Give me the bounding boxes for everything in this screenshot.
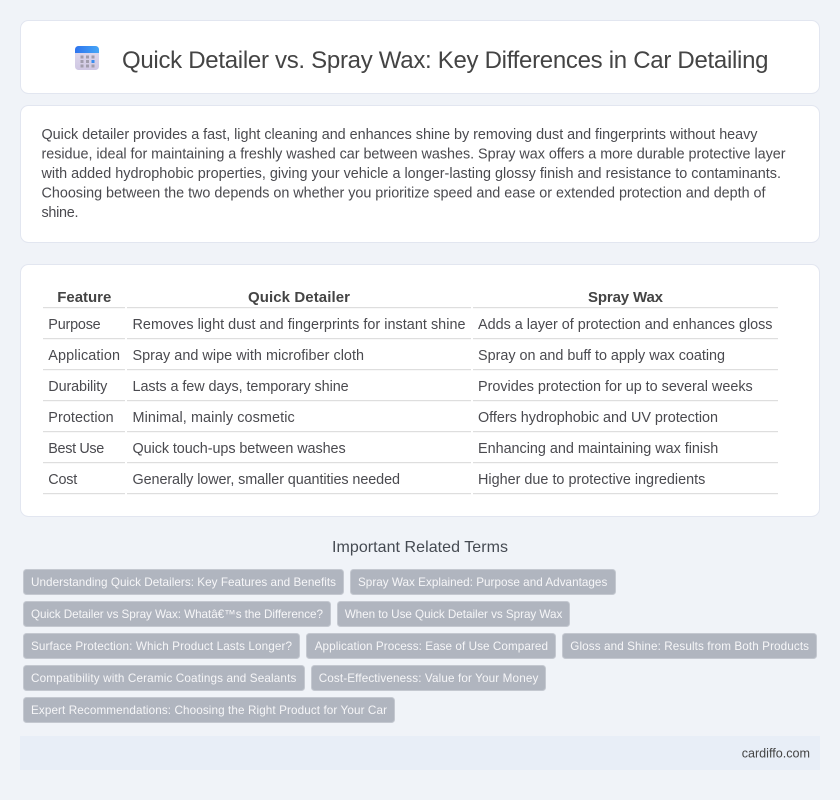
table row: purpose: Removes light dust and fingerprints for instant shine: [132, 317, 466, 333]
table row: durability: Provides protection for up to several weeks: [478, 379, 753, 395]
table row: durability: [48, 379, 753, 395]
table row: cost: [48, 472, 705, 488]
tag: Compatibility with Ceramic Coatings and Sealants: [31, 672, 296, 685]
table row: protection: [48, 410, 718, 426]
tag: Gloss and Shine: Results from Both Products: [570, 640, 809, 653]
table header row: Feature: [57, 289, 111, 306]
tag: [312, 666, 546, 690]
tag: [24, 666, 304, 690]
tag: [338, 602, 570, 626]
table row: protection: Minimal, mainly cosmetic: [132, 410, 295, 426]
tag: [350, 570, 616, 594]
panel: intro paragraph: [20, 106, 820, 242]
text block: intro: with added hydrophobic properties, giving your vehicle a longer-lasting glossy finish and resistance to contaminants.: [40, 166, 781, 182]
text block: intro: shine.: [42, 205, 78, 221]
table row: best use: [48, 441, 718, 457]
table row: purpose: Purpose: [48, 317, 101, 333]
table row: application: Spray and wipe with microfiber cloth: [132, 348, 364, 364]
tag: Surface Protection: Which Product Lasts Longer?: [31, 640, 292, 653]
tag: [306, 634, 556, 658]
table row: protection: Offers hydrophobic and UV protection: [478, 410, 718, 426]
tag: [24, 698, 394, 722]
tag: Expert Recommendations: Choosing the Right Product for Your Car: [31, 704, 387, 717]
tag: [24, 634, 300, 658]
text block: intro: [40, 127, 786, 221]
title: Quick Detailer vs. Spray Wax: Key Differences in Car Detailing: [122, 47, 768, 74]
table row: cost: Generally lower, smaller quantities needed: [132, 472, 400, 488]
table row: cost: Cost: [48, 472, 77, 488]
table row: application: [48, 348, 725, 364]
table header row: Quick Detailer: [248, 289, 350, 306]
heading: important related terms: Important Related Terms: [332, 539, 508, 556]
table row: best use: Best Use: [48, 441, 104, 457]
tag: Cost-Effectiveness: Value for Your Money: [319, 672, 538, 685]
table row: purpose: [48, 317, 773, 333]
table row: cost: Higher due to protective ingredients: [478, 472, 705, 488]
text block: intro: Quick detailer provides a fast, light cleaning and enhances shine by removing dust and fingerprints without heavy: [42, 127, 758, 143]
tag: Spray Wax Explained: Purpose and Advantages: [358, 576, 607, 589]
panel: comparison table: [20, 264, 820, 516]
table row: application: Application: [48, 348, 120, 364]
table header row: [57, 289, 664, 306]
table row: protection: Protection: [48, 410, 114, 426]
tag: [24, 602, 330, 626]
text block: intro: residue, ideal for maintaining a freshly washed car between washes. Spray wax offers a more durable protective layer: [42, 146, 786, 162]
footer: cardiffo.com: [742, 746, 810, 760]
footer: [20, 736, 820, 770]
table row: durability: Lasts a few days, temporary shine: [132, 379, 349, 395]
panel: header: [20, 20, 820, 94]
tag list: related terms: [24, 570, 816, 722]
tag: [562, 634, 816, 658]
tag: Understanding Quick Detailers: Key Features and Benefits: [31, 576, 336, 589]
tag: Application Process: Ease of Use Compared: [315, 640, 548, 653]
text block: intro: Choosing between the two depends on whether you prioritize speed and ease or extended protection and depth of: [42, 186, 766, 202]
table row: purpose: Adds a layer of protection and enhances gloss: [478, 317, 772, 333]
tag: [24, 570, 344, 594]
icon: calendar: [75, 46, 99, 70]
table row: application: Spray on and buff to apply wax coating: [478, 348, 725, 364]
tag: Quick Detailer vs Spray Wax: Whatâ€™s the Difference?: [31, 608, 323, 621]
table row: best use: Enhancing and maintaining wax finish: [478, 441, 718, 457]
table row: best use: Quick touch-ups between washes: [132, 441, 346, 457]
tag: When to Use Quick Detailer vs Spray Wax: [345, 608, 562, 621]
table row: durability: Durability: [48, 379, 108, 395]
table header row: Spray Wax: [588, 289, 664, 306]
